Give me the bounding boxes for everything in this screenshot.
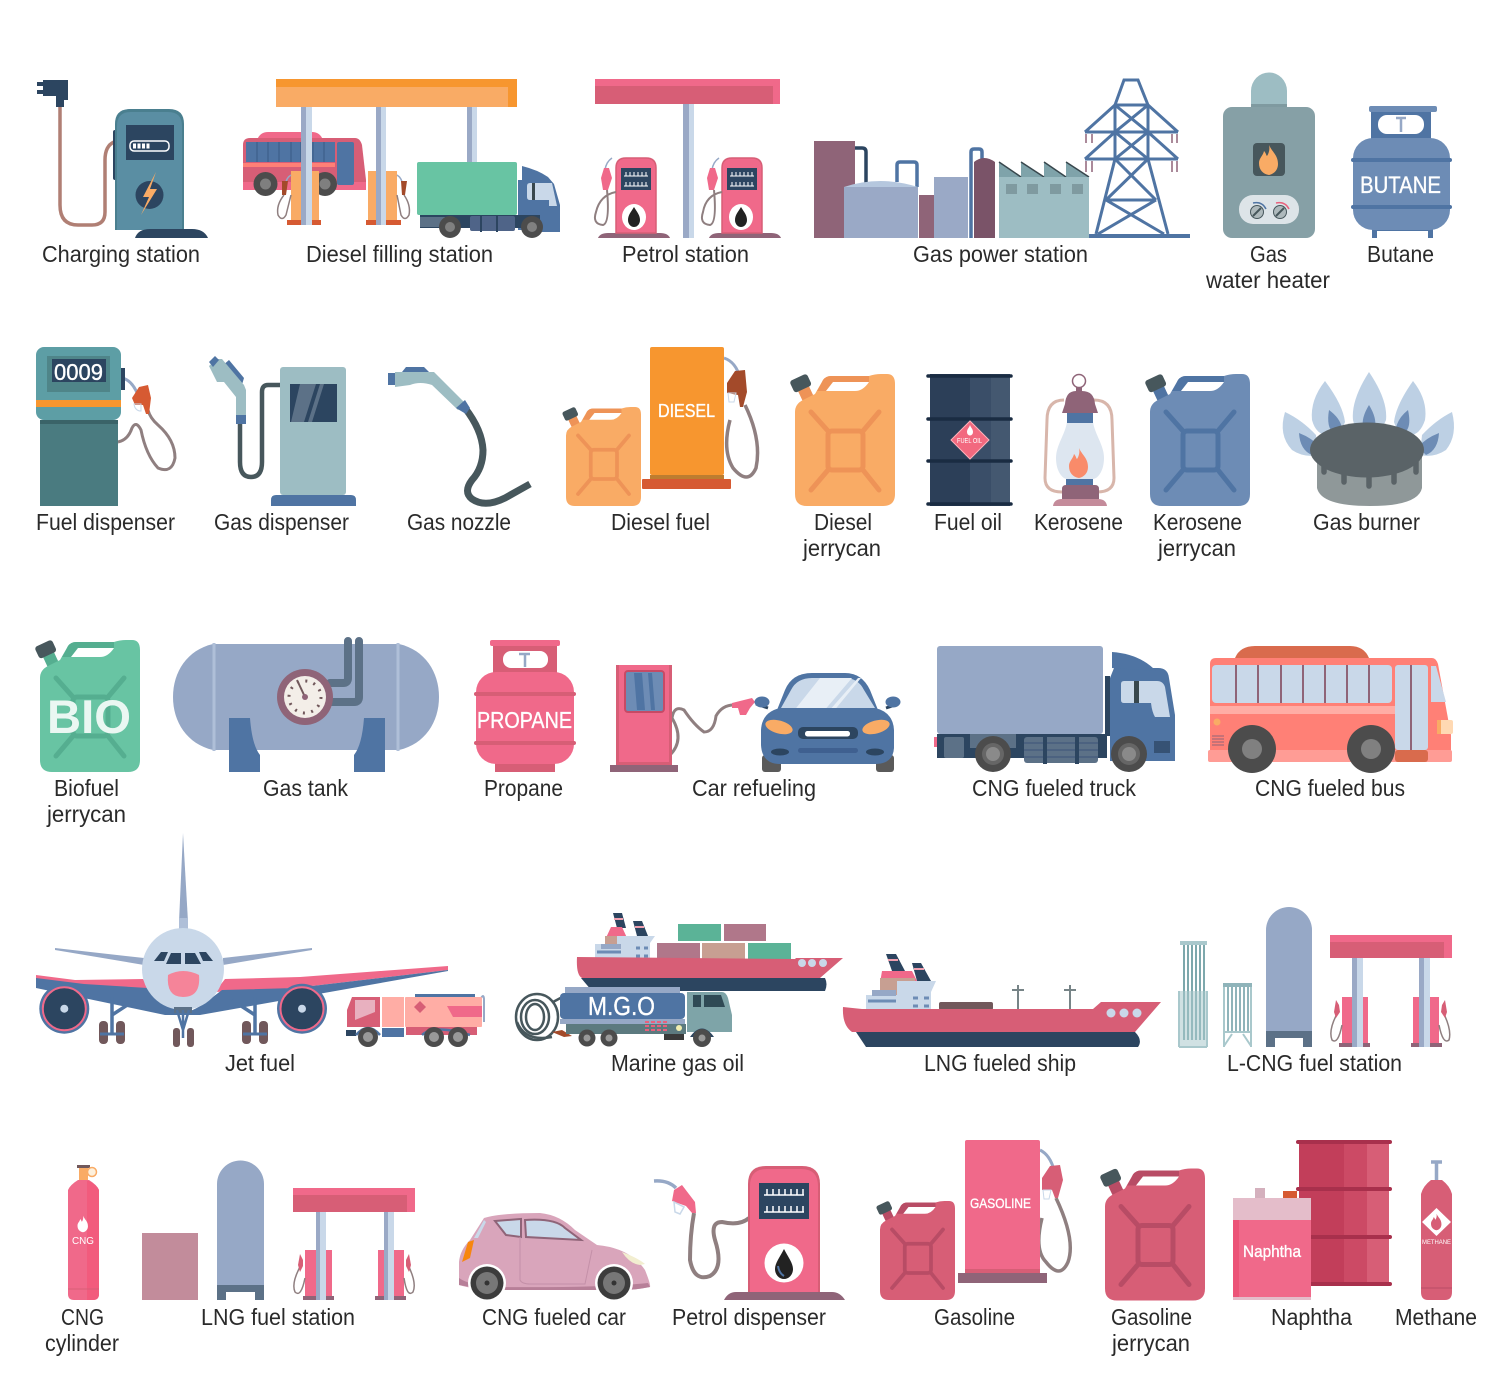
label: LNG fueled ship — [924, 1050, 1076, 1076]
icon: cylinder — [68, 1165, 99, 1300]
label: Kerosene — [1153, 509, 1242, 535]
panel: CNG cylinder — [45, 1165, 119, 1356]
label — [802, 509, 881, 561]
label: Gas power station — [913, 241, 1088, 267]
icon: petrol dispenser — [654, 1166, 845, 1300]
icon: canopy — [276, 79, 517, 165]
label: Propane — [484, 775, 563, 801]
panel: jet fuel — [36, 833, 484, 1076]
icon: gas dispenser — [209, 356, 356, 506]
icon: bus — [1208, 646, 1453, 773]
panel: gasoline — [876, 1140, 1070, 1330]
label — [46, 775, 126, 827]
panel: gas dispenser — [209, 356, 356, 535]
icon: tank — [1266, 907, 1312, 1047]
label: Methane — [1395, 1304, 1477, 1330]
panel: diesel fuel — [562, 347, 758, 535]
icon: pump — [642, 347, 758, 489]
panel: CNG fueled bus — [1208, 646, 1453, 801]
panel: charging station — [37, 80, 208, 267]
label: CNG fueled truck — [972, 775, 1136, 801]
label — [1111, 1304, 1192, 1356]
label: Charging station — [42, 241, 200, 267]
panel: butane — [1351, 106, 1452, 267]
icon: water heater — [1223, 72, 1315, 238]
icon: jerrycan — [1144, 373, 1250, 506]
icon: jerrycan — [1099, 1168, 1205, 1300]
icon: cargo ship — [577, 913, 843, 991]
panel: diesel jerrycan — [789, 373, 895, 561]
icon: pumps — [278, 107, 409, 225]
panel: biofuel jerrycan — [34, 639, 140, 827]
label: Gas nozzle — [407, 509, 511, 535]
icon: charging station — [37, 80, 208, 238]
panel: CNG fueled truck — [934, 646, 1175, 801]
icon: bus — [243, 132, 366, 196]
icon: small jerrycan — [562, 407, 641, 506]
icon: pump: DIESEL — [658, 401, 715, 421]
panel: fuel dispenser — [36, 347, 175, 535]
label: Car refueling — [692, 775, 816, 801]
label: Petrol station — [622, 241, 749, 267]
label — [1205, 241, 1330, 293]
label: Gas tank — [263, 775, 348, 801]
panel: petrol dispenser — [654, 1166, 845, 1330]
icon: airplane — [36, 833, 448, 1047]
icon: pump — [610, 665, 755, 772]
icon: pump — [958, 1140, 1070, 1283]
panel: kerosene jerrycan — [1144, 373, 1250, 561]
label: jerrycan — [1111, 1330, 1190, 1356]
label: Diesel — [814, 509, 872, 535]
panel: gas nozzle — [388, 367, 530, 535]
panel: gasoline jerrycan — [1099, 1168, 1205, 1356]
label: jerrycan — [46, 801, 126, 827]
label: cylinder — [45, 1330, 119, 1356]
label: CNG fueled bus — [1255, 775, 1405, 801]
label: Naphtha — [1271, 1304, 1352, 1330]
label: Petrol dispenser — [672, 1304, 826, 1330]
panel: marine gas oil — [516, 913, 843, 1076]
icon: butane cylinder: BUTANE — [1360, 172, 1441, 199]
label: Gas — [1250, 241, 1287, 267]
label: Gasoline — [1111, 1304, 1192, 1330]
panel: propane — [474, 640, 576, 801]
label: jerrycan — [1157, 535, 1236, 561]
icon: station — [1330, 935, 1452, 1047]
icon: station — [293, 1188, 415, 1300]
icon: barrel — [1298, 1140, 1390, 1286]
icon: gas burner — [1283, 372, 1454, 506]
icon: lantern — [1045, 374, 1114, 506]
icon: methane cylinder: METHANE — [1422, 1239, 1452, 1246]
icon: can — [1233, 1188, 1311, 1300]
icon: tank — [217, 1160, 264, 1300]
icon: propane cylinder: PROPANE — [477, 707, 572, 733]
icon: ship — [843, 954, 1161, 1047]
panel: LNG fueled ship — [843, 954, 1161, 1076]
label: water heater — [1205, 267, 1330, 293]
panel: methane — [1395, 1162, 1477, 1330]
label — [45, 1304, 119, 1356]
icon: jerrycan — [34, 639, 140, 772]
panel: kerosene — [1034, 374, 1123, 535]
label: Gasoline — [934, 1304, 1015, 1330]
icon: can: Naphtha — [1243, 1242, 1301, 1261]
icon: barrel — [928, 374, 1011, 506]
panel: car refueling — [610, 665, 900, 801]
icon: fuel dispenser: 0009 — [54, 359, 103, 385]
label — [1153, 509, 1242, 561]
panel: diesel filling station — [243, 79, 560, 267]
label: Jet fuel — [225, 1050, 295, 1076]
icon: pump: GASOLINE — [970, 1195, 1031, 1211]
icon: gas tank — [173, 641, 439, 772]
label: CNG — [61, 1304, 104, 1330]
panel: CNG fueled car — [459, 1213, 650, 1330]
icon: jerrycan: BIO — [47, 690, 131, 743]
icon: car — [459, 1213, 650, 1302]
icon: block — [142, 1233, 198, 1300]
icon: car — [754, 673, 900, 772]
icon: M.G.O truck — [516, 987, 732, 1047]
panel: naphtha — [1233, 1140, 1390, 1330]
label: jerrycan — [802, 535, 881, 561]
panel: petrol station — [595, 79, 781, 267]
icon: vaporizers — [1178, 941, 1252, 1047]
icon: truck — [417, 162, 560, 238]
label: Diesel filling station — [306, 241, 493, 267]
icon: butane cylinder — [1351, 106, 1452, 238]
icon: jerrycan — [789, 373, 895, 506]
label: Marine gas oil — [611, 1050, 744, 1076]
label: Fuel dispenser — [36, 509, 175, 535]
label: LNG fuel station — [201, 1304, 355, 1330]
icon: propane cylinder — [474, 640, 576, 772]
icon: methane cylinder — [1421, 1162, 1452, 1300]
icon: fuel dispenser — [36, 347, 175, 506]
icon: fuel truck — [346, 994, 484, 1047]
label: L-CNG fuel station — [1227, 1050, 1402, 1076]
panel: fuel oil — [928, 374, 1011, 535]
label: Fuel oil — [934, 509, 1002, 535]
panel: L-CNG fuel station — [1178, 907, 1452, 1076]
label: Kerosene — [1034, 509, 1123, 535]
icon: cylinder: CNG — [72, 1235, 94, 1247]
label: Biofuel — [54, 775, 119, 801]
icon: M.G.O truck: M.G.O — [588, 991, 655, 1021]
label: Gas burner — [1313, 509, 1420, 535]
icon: gas nozzle — [388, 367, 530, 503]
icon: truck — [934, 646, 1175, 772]
panel: gas power station — [814, 80, 1190, 267]
icon: gas power station — [814, 80, 1190, 238]
panel: LNG fuel station — [142, 1160, 415, 1330]
label: CNG fueled car — [482, 1304, 626, 1330]
label: Butane — [1367, 241, 1434, 267]
icon: barrel: FUEL OIL — [957, 438, 982, 445]
label: Gas dispenser — [214, 509, 349, 535]
panel: gas tank — [173, 641, 439, 801]
icon: small jerrycan — [876, 1201, 955, 1300]
label: Diesel fuel — [611, 509, 710, 535]
icon: petrol station — [595, 79, 781, 238]
panel: gas burner — [1283, 372, 1454, 535]
panel: gas water heater — [1205, 72, 1330, 293]
